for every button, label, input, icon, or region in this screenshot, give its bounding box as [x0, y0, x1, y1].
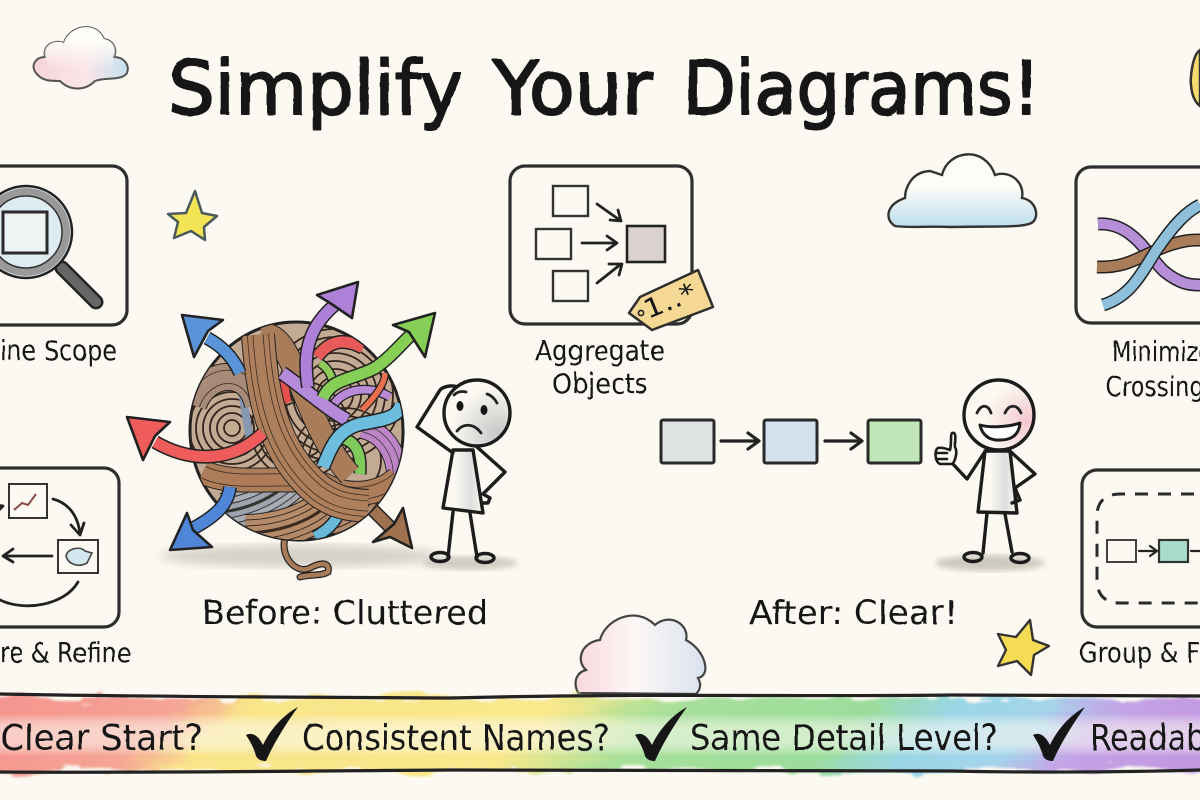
- background wraps: [224, 420, 240, 436]
- panel frame: [510, 166, 692, 324]
- figure: happy stick person: [935, 380, 1045, 571]
- item: consistent names: Consistent Names?: [302, 718, 610, 759]
- panel frame: [1076, 167, 1200, 323]
- label: define scope: ine Scope: [0, 334, 117, 367]
- icon: aggregation diagram: [536, 186, 665, 301]
- ground shadow: [160, 545, 440, 567]
- label: aggregate objects: Aggregate: [535, 334, 665, 367]
- box 2: [764, 420, 817, 463]
- arrow 1: [721, 433, 759, 449]
- label: minimize crossings: [1106, 335, 1200, 403]
- feet: [431, 552, 494, 562]
- illustration: tangled yarn ball: [127, 282, 440, 577]
- body: [978, 451, 1017, 513]
- panel: review and refine: [0, 468, 131, 669]
- title: Your: [492, 46, 654, 132]
- label: aggregate objects: [535, 334, 665, 400]
- arms and legs: [417, 386, 505, 557]
- cloud: top left: [34, 27, 128, 88]
- main wraps: [193, 377, 258, 405]
- check mark 2: [635, 707, 687, 761]
- checklist banner: [0, 694, 1200, 772]
- icon: iteration loop: [0, 484, 98, 606]
- panel frame: [1082, 470, 1200, 627]
- label: refine: re & Refine: [0, 636, 131, 669]
- tangled coloured strands: [317, 342, 363, 357]
- body: [443, 450, 483, 513]
- feet: [964, 552, 1029, 562]
- panel: aggregate objects: [510, 166, 713, 400]
- panel: define scope: [0, 166, 127, 367]
- icon: star right: [998, 620, 1049, 675]
- banner top line: [0, 694, 1200, 698]
- label: aggregate objects: Objects: [552, 367, 648, 400]
- banner bottom line: [0, 770, 1200, 772]
- panel: minimize crossings: [1076, 167, 1200, 403]
- thumbs up hand: [936, 433, 956, 464]
- arms and legs: [952, 452, 1035, 553]
- arrow 2: [825, 433, 862, 449]
- label: after clear: After: Clear!: [749, 593, 958, 632]
- title: [168, 46, 1040, 132]
- icon: magnifying glass: [0, 186, 96, 302]
- arrow: blue down left: [170, 487, 230, 550]
- tag: 1..*: [629, 270, 713, 330]
- icon: crossing lines: [1097, 205, 1200, 305]
- rainbow crayon fill: [0, 698, 1200, 770]
- icon: star left: [168, 191, 217, 240]
- arrow: brown down right: [370, 507, 412, 548]
- arrow: green up right: [323, 313, 435, 398]
- arrow: red left: [127, 417, 263, 460]
- top coloured strands: [282, 373, 347, 420]
- arrow: blue top left: [182, 315, 240, 373]
- panel: group and frame: [1079, 470, 1200, 669]
- head and sad face: [444, 380, 510, 446]
- title: Simplify: [168, 46, 463, 132]
- cloud: bottom: [576, 616, 705, 694]
- head and happy face: [964, 380, 1034, 450]
- check mark 1: [246, 707, 298, 761]
- tag: 1..*: 1..*: [639, 277, 701, 325]
- box 1: [661, 420, 714, 463]
- panel frame: [0, 468, 119, 627]
- check mark 3: [1033, 707, 1085, 761]
- icon: grouped flow: [1097, 494, 1200, 603]
- icon: sun: [1191, 50, 1200, 106]
- panel frame: [0, 166, 127, 325]
- diagram: clean three-box flow: [661, 420, 921, 463]
- label: before cluttered: Before: Cluttered: [202, 593, 488, 632]
- arrow: purple up: [306, 282, 358, 387]
- box 3: [868, 420, 921, 463]
- figure: confused stick person: [417, 380, 518, 570]
- cloud: top right: [888, 154, 1036, 227]
- ground shadow: [422, 556, 518, 570]
- item: clear start: Clear Start?: [0, 718, 203, 759]
- yarn ball: [189, 322, 403, 540]
- title: Diagrams!: [683, 46, 1040, 132]
- ground shadow: [935, 555, 1045, 571]
- yarn tail: [284, 538, 328, 577]
- item: same detail level: Same Detail Level?: [690, 718, 998, 759]
